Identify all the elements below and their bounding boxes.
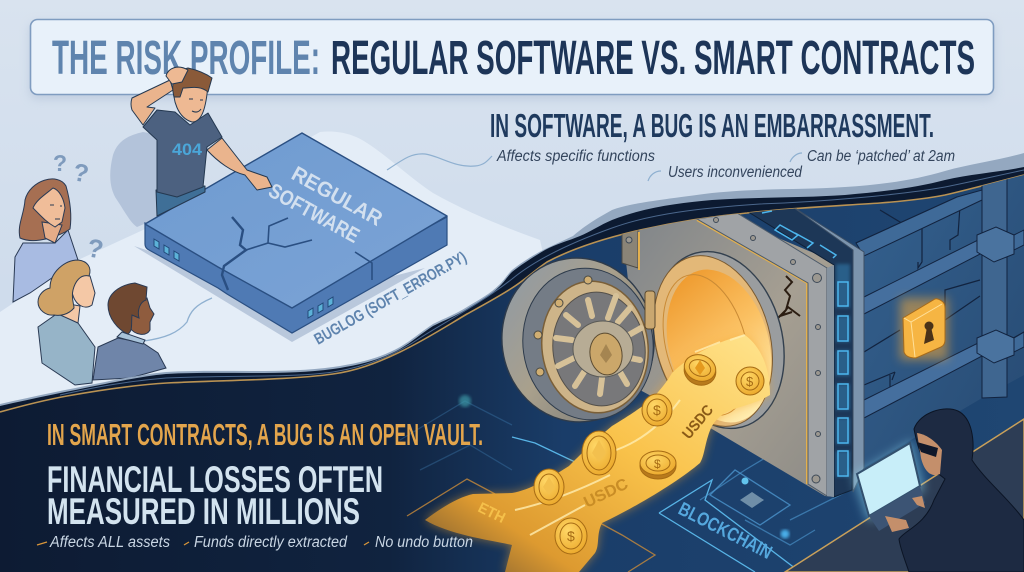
coin: USDC middle: $	[653, 402, 661, 418]
smart contract heading: IN SMART CONTRACTS, A BUG IS AN OPEN VAULT.	[47, 417, 483, 452]
door spokes	[556, 296, 641, 394]
laptop screen glow	[852, 440, 925, 522]
LED lights left	[154, 239, 179, 261]
hair	[19, 179, 71, 241]
losses heading	[47, 459, 383, 532]
stream glow	[425, 335, 770, 572]
coin: USDC flat	[640, 451, 676, 479]
software bullets	[387, 148, 955, 181]
upper top beam	[856, 190, 982, 256]
LED cells	[762, 211, 848, 476]
stream label ETH: ETH	[475, 499, 508, 527]
wheel hub	[573, 321, 633, 377]
connector line from bug log	[144, 298, 212, 341]
body	[13, 230, 78, 302]
question mark 3: ?	[85, 232, 106, 265]
question marks	[53, 150, 106, 265]
hair	[38, 260, 90, 315]
keyhole	[924, 322, 934, 344]
device: regular software	[134, 133, 447, 342]
coin: USDC lower: $	[567, 528, 575, 544]
lighter edge stripe	[60, 170, 1024, 395]
head	[174, 85, 208, 122]
question mark 2: ?	[71, 158, 91, 189]
steel strip	[697, 213, 827, 496]
hand on head	[166, 67, 188, 84]
steel strip edge	[827, 265, 834, 497]
connector lines	[387, 153, 802, 181]
glowing interior	[666, 270, 772, 422]
coin: USDC middle	[642, 394, 672, 426]
collar	[117, 332, 145, 344]
crack	[222, 217, 246, 290]
hoodie body	[899, 409, 1024, 572]
circuit nodes	[459, 395, 790, 538]
stream body	[425, 335, 770, 572]
question mark 1: ?	[53, 150, 67, 176]
bullet: funds extracted: Funds directly extracted	[194, 534, 348, 551]
LED strip	[748, 208, 852, 498]
raised arm	[131, 80, 173, 125]
stream label USDC lower: USDC	[581, 476, 631, 512]
LED lights right	[308, 297, 333, 318]
face	[33, 188, 65, 227]
face features	[189, 99, 203, 112]
device side faces	[145, 217, 447, 333]
device top face	[145, 133, 447, 308]
lower junction box	[977, 330, 1014, 363]
dark panel: smart contracts	[0, 167, 1024, 572]
bullet: can be patched: Can be ‘patched’ at 2am	[807, 148, 955, 165]
face	[72, 275, 95, 307]
floor circuit lines	[400, 401, 850, 572]
bug log label: BUGLOG (SOFT_ERROR.PY)	[312, 249, 470, 348]
legs	[156, 186, 205, 216]
LED glow	[836, 264, 850, 477]
dark fill below edge	[0, 175, 1024, 572]
body	[93, 338, 166, 380]
face	[130, 298, 154, 334]
vault and wall area	[491, 170, 1024, 497]
vault front face	[622, 205, 864, 497]
bullet: users inconvenienced: Users inconvenienced	[668, 164, 803, 181]
right brick wall	[856, 170, 1024, 470]
upper beam	[864, 237, 984, 314]
pointing arm	[207, 138, 272, 190]
t-shirt	[143, 110, 222, 197]
hacker hands	[885, 496, 925, 532]
upper junction box	[977, 227, 1014, 262]
wave band	[0, 153, 1024, 572]
person: developer with 404 shirt	[131, 67, 272, 216]
device label line 1: REGULAR	[288, 162, 386, 231]
bullet: affects specific functions: Affects specific functions	[496, 148, 655, 165]
rivets	[626, 218, 822, 483]
body	[38, 313, 95, 385]
losses heading: MEASURED IN MILLIONS	[47, 491, 360, 532]
stream label USDC upper: USDC	[679, 402, 717, 443]
hair	[108, 283, 147, 334]
neck	[58, 303, 80, 323]
losses heading: FINANCIAL LOSSES OFTEN	[47, 459, 383, 500]
lower beam	[864, 340, 984, 418]
coin: ETH top	[680, 350, 720, 390]
smart contract bullets	[37, 534, 473, 551]
hacker	[852, 409, 1024, 572]
far right beams	[1014, 230, 1024, 352]
vault door	[501, 258, 656, 422]
bullet: affects all assets: Affects ALL assets	[49, 534, 170, 551]
stream highlights	[515, 335, 745, 535]
light floor platform	[0, 132, 545, 410]
vault opening	[654, 250, 785, 430]
wall pillar	[982, 170, 1007, 398]
title text: first part: THE RISK PROFILE:	[52, 32, 320, 85]
keyboard	[869, 486, 925, 531]
light edge pillar	[790, 205, 864, 492]
wall crack	[778, 276, 800, 318]
device label line 2: SOFTWARE	[265, 179, 363, 248]
facial features	[50, 205, 62, 219]
coin: USDC flat: $	[654, 457, 661, 471]
bullet: no undo: No undo button	[375, 534, 473, 551]
person: man with dark hair	[93, 283, 166, 380]
lock icon	[900, 298, 948, 360]
coin: USDC right: $	[746, 374, 754, 389]
wall brick lines	[856, 197, 1024, 390]
hacker desk	[785, 419, 1024, 572]
hacker face	[917, 433, 942, 475]
gold edge line	[0, 175, 1024, 412]
coin: ETH lower	[534, 469, 564, 505]
hinge	[645, 291, 655, 329]
404 text: 404	[172, 140, 203, 159]
person: woman with blond hair	[38, 260, 95, 385]
coin: USDC right	[736, 367, 764, 395]
laptop	[857, 443, 920, 516]
coin: ETH large	[582, 431, 616, 475]
gold stream of funds	[425, 335, 770, 572]
person shadow on wall	[110, 132, 165, 227]
lock bevel	[904, 304, 942, 357]
door rivets	[534, 276, 592, 376]
hacker mask	[917, 442, 938, 457]
bullet arrows	[37, 542, 369, 545]
left pillar	[622, 228, 638, 268]
neck	[42, 222, 62, 243]
person: woman with brown hair	[13, 179, 78, 302]
title banner	[30, 20, 994, 99]
gold trim	[697, 220, 807, 484]
hair	[173, 68, 212, 97]
coin: USDC lower	[555, 518, 587, 554]
